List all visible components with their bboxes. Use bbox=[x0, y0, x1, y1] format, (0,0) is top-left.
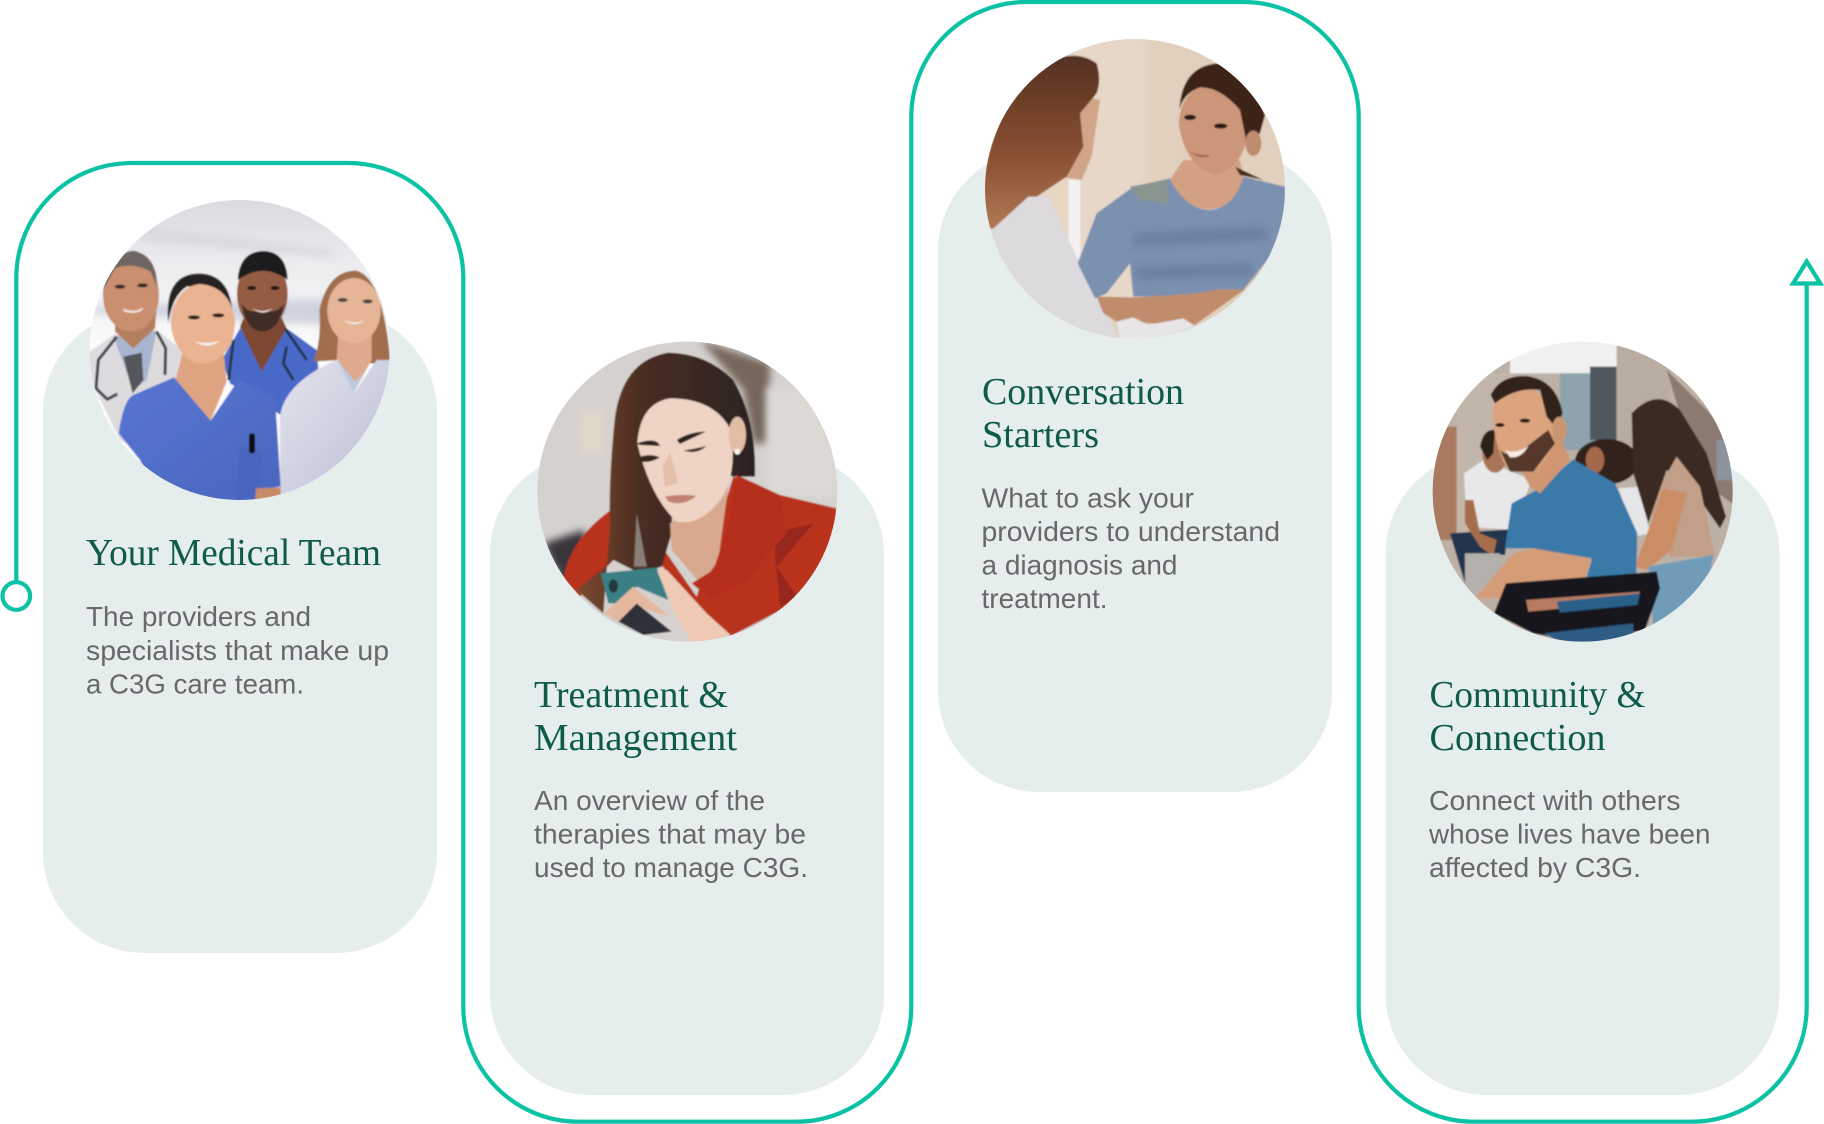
photo: patient talking with doctor bbox=[982, 36, 1288, 342]
panel background bbox=[938, 150, 1332, 792]
heading bbox=[982, 371, 1184, 456]
body text: affected by C3G. bbox=[1429, 852, 1641, 883]
body text: providers to understand bbox=[982, 516, 1280, 547]
heading: Treatment & bbox=[534, 674, 728, 716]
body text bbox=[534, 785, 808, 883]
body text: a diagnosis and bbox=[982, 550, 1178, 580]
heading: Management bbox=[534, 717, 737, 759]
card: Conversation Starters bbox=[938, 36, 1332, 792]
body text: An overview of the bbox=[534, 785, 765, 816]
body text: whose lives have been bbox=[1428, 818, 1710, 850]
body text: a C3G care team. bbox=[86, 668, 304, 700]
body text: treatment. bbox=[982, 583, 1108, 614]
heading: Starters bbox=[982, 414, 1099, 456]
card: Community & Connection bbox=[1386, 338, 1780, 1095]
photo: medical team bbox=[87, 197, 393, 503]
card: Treatment & Management bbox=[490, 338, 884, 1095]
body text bbox=[86, 601, 389, 700]
heading: Connection bbox=[1430, 717, 1606, 759]
heading bbox=[534, 674, 737, 759]
photo: support group bbox=[1430, 338, 1737, 645]
body text bbox=[982, 482, 1280, 614]
panel background bbox=[43, 311, 437, 953]
body text: specialists that make up bbox=[86, 635, 389, 666]
body text: What to ask your bbox=[982, 482, 1194, 514]
panel background bbox=[1386, 453, 1780, 1095]
body text: Connect with others bbox=[1429, 785, 1680, 816]
body text: therapies that may be bbox=[534, 818, 806, 850]
card: Your Medical Team bbox=[43, 197, 437, 953]
body text: used to manage C3G. bbox=[534, 852, 808, 883]
body text bbox=[1428, 785, 1710, 883]
body text: The providers and bbox=[86, 601, 311, 632]
photo: woman looking at phone bbox=[533, 338, 842, 647]
heading: Community & bbox=[1430, 674, 1646, 716]
heading: Conversation bbox=[982, 371, 1184, 413]
heading bbox=[1430, 674, 1646, 759]
panel background bbox=[490, 453, 884, 1095]
heading: Your Medical Team bbox=[86, 532, 381, 574]
